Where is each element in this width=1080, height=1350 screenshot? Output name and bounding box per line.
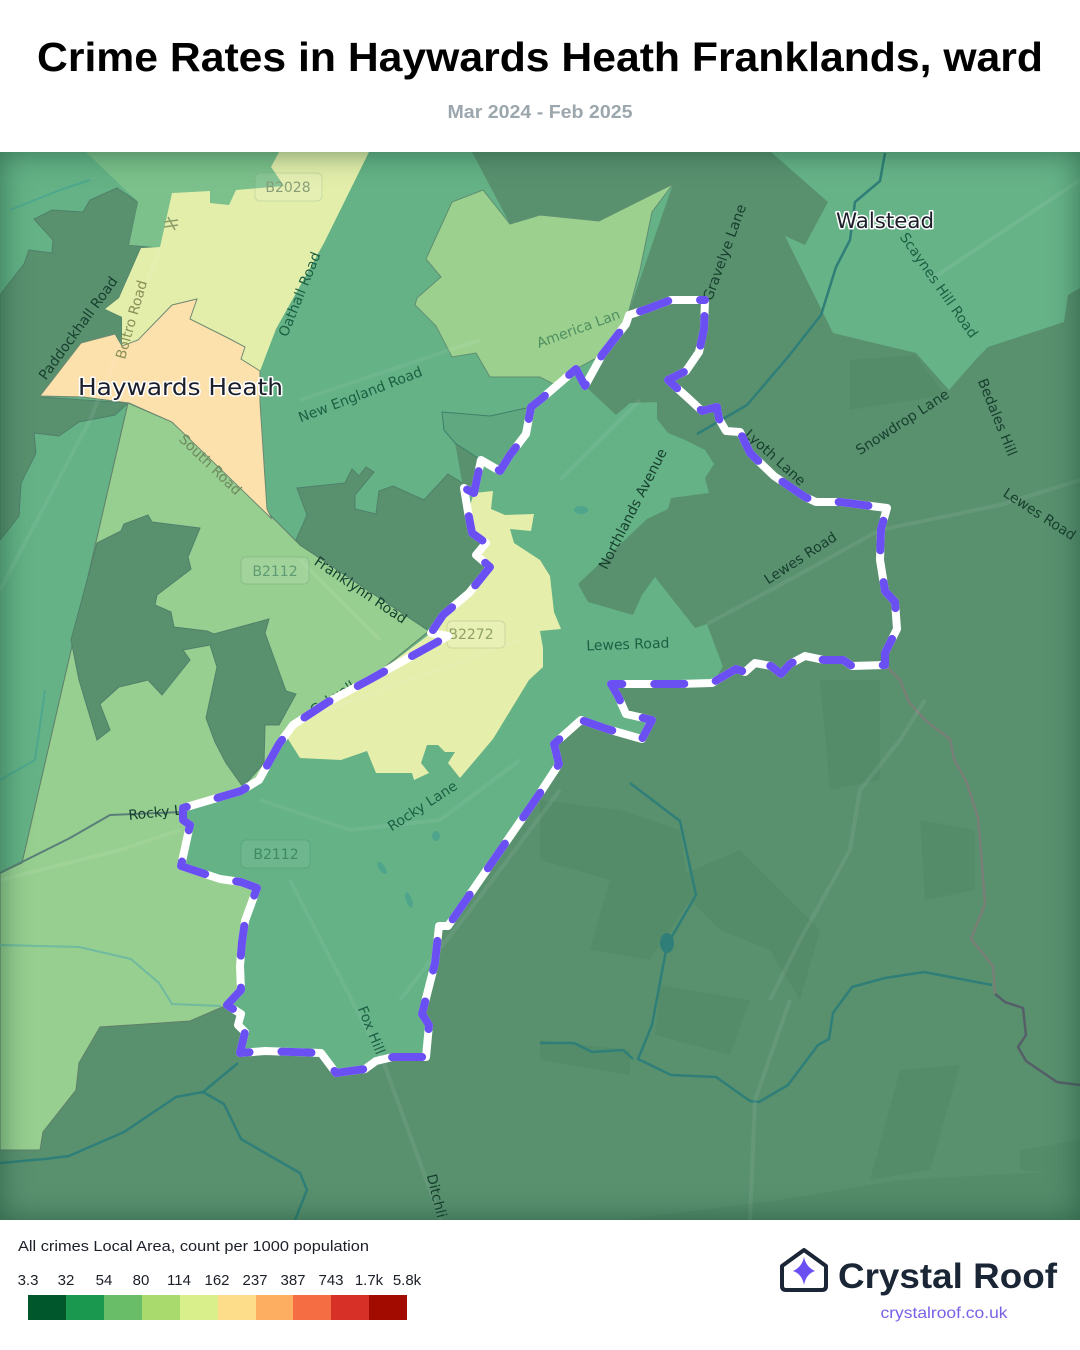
- legend scale labels: 162: [204, 1272, 230, 1289]
- label: Lewes Road centre: Lewes Road: [762, 529, 840, 588]
- area: dark top edge patch: [228, 152, 292, 168]
- shield: B2028: B2028: [265, 180, 311, 196]
- shield: B2112 north: B2112: [252, 564, 298, 580]
- label: Lewes Road east: Lewes Road: [1000, 485, 1078, 544]
- parish boundary line lower: [995, 994, 1080, 1085]
- place labels: [78, 209, 934, 401]
- label: Boltro Road: Boltro Road: [113, 279, 151, 361]
- label: Lewes Road west: Lewes Road: [586, 636, 670, 654]
- date range subtitle: Mar 2024 - Feb 2025: [448, 102, 632, 122]
- area: dark wedge: [455, 444, 478, 487]
- darker field patches: [540, 355, 1080, 1220]
- logo URL: crystalroof.co.uk: [880, 1305, 1009, 1322]
- shield: B2112 south: B2112: [253, 847, 299, 863]
- label: Lyoth Lane: Lyoth Lane: [741, 427, 808, 489]
- label: Snowdrop Lane: Snowdrop Lane: [853, 387, 952, 459]
- shield: B2272: B2272: [448, 627, 494, 643]
- roads: [0, 180, 1080, 1220]
- shield: B2272: [447, 621, 505, 648]
- area: low-crime dark green base: [0, 152, 1080, 1220]
- logo icon: house with star: [782, 1250, 826, 1290]
- area: America Lane light green: [415, 184, 673, 385]
- choropleth map: [0, 152, 1080, 1220]
- area: orange Haywards Heath centre: [40, 299, 272, 519]
- label: America Lane: America Lan: [535, 307, 622, 352]
- area: yellow north: [105, 152, 369, 371]
- station icon: [164, 217, 178, 230]
- legend title: All crimes Local Area, count per 1000 population: [18, 1238, 369, 1255]
- ward ponds: [376, 506, 588, 909]
- area: slightly darker enclosure: [442, 408, 527, 465]
- legend scale labels: 387: [280, 1272, 306, 1289]
- legend scale labels: 1.7k: [355, 1272, 384, 1289]
- legend scale labels: 743: [318, 1272, 344, 1289]
- shield: B2112 south: [241, 840, 310, 868]
- place: Walstead: Walstead: [836, 209, 934, 233]
- area: dark north-west patch: [0, 188, 155, 540]
- title: Crime Rates in Haywards Heath Franklands, ward: [37, 34, 1043, 80]
- label: Rocky Lane east: Rocky Lane: [385, 778, 461, 835]
- road to parish line: [0, 812, 183, 873]
- road labels: [36, 202, 1078, 1220]
- label: Gravelye Lane: Gravelye Lane: [700, 202, 750, 303]
- legend scale labels: 237: [242, 1272, 268, 1289]
- area: medium green: [0, 152, 723, 1150]
- area: light green south of town: [0, 403, 429, 1150]
- label: Rocky Lane west: Rocky L: [128, 802, 183, 824]
- legend scale labels: 114: [167, 1272, 191, 1289]
- label: Fox Hill: Fox Hill: [354, 1004, 388, 1057]
- parish boundary line: [885, 665, 995, 994]
- label: Bedales Hill: Bedales Hill: [974, 376, 1020, 459]
- legend scale labels: 80: [133, 1272, 149, 1289]
- area: dark central patch: [296, 467, 489, 631]
- label: Colwell Road: Colwell: [307, 678, 358, 719]
- legend scale labels: [18, 1272, 422, 1289]
- label: Franklynn Road: Franklynn Road: [311, 554, 409, 627]
- label: Northlands Avenue: Northlands Avenue: [596, 446, 671, 572]
- area: top-right medium green: [771, 152, 1080, 390]
- label: New England Road: New England Road: [296, 364, 425, 426]
- shield: B2112 north: [241, 557, 309, 584]
- label: Oathall Road: Oathall Road: [276, 250, 325, 339]
- area: pale green north: [86, 152, 284, 247]
- pond: [660, 933, 674, 953]
- ward boundary: Haywards Heath Franklands: [181, 300, 897, 1073]
- legend scale labels: 54: [96, 1272, 112, 1289]
- label: Paddockhall Road: Paddockhall Road: [36, 274, 121, 383]
- place: Haywards Heath: Haywards Heath: [78, 375, 283, 401]
- water courses: [0, 153, 992, 1220]
- legend scale labels: 5.8k: [393, 1272, 422, 1289]
- label: South Road: South Road: [175, 431, 244, 499]
- logo wordmark: Crystal Roof: [838, 1257, 1057, 1296]
- label: Ditchling: Ditchli: [423, 1173, 449, 1220]
- legend scale labels: 3.3: [18, 1272, 38, 1289]
- label: Scaynes Hill Road: Scaynes Hill Road: [896, 230, 981, 341]
- shield: B2028: [255, 173, 322, 201]
- legend colour scale: [28, 1295, 407, 1320]
- area: yellow Franklands: [288, 491, 561, 780]
- legend scale labels: 32: [58, 1272, 74, 1289]
- road shields: [241, 173, 505, 868]
- area: dark west patch: [71, 515, 296, 787]
